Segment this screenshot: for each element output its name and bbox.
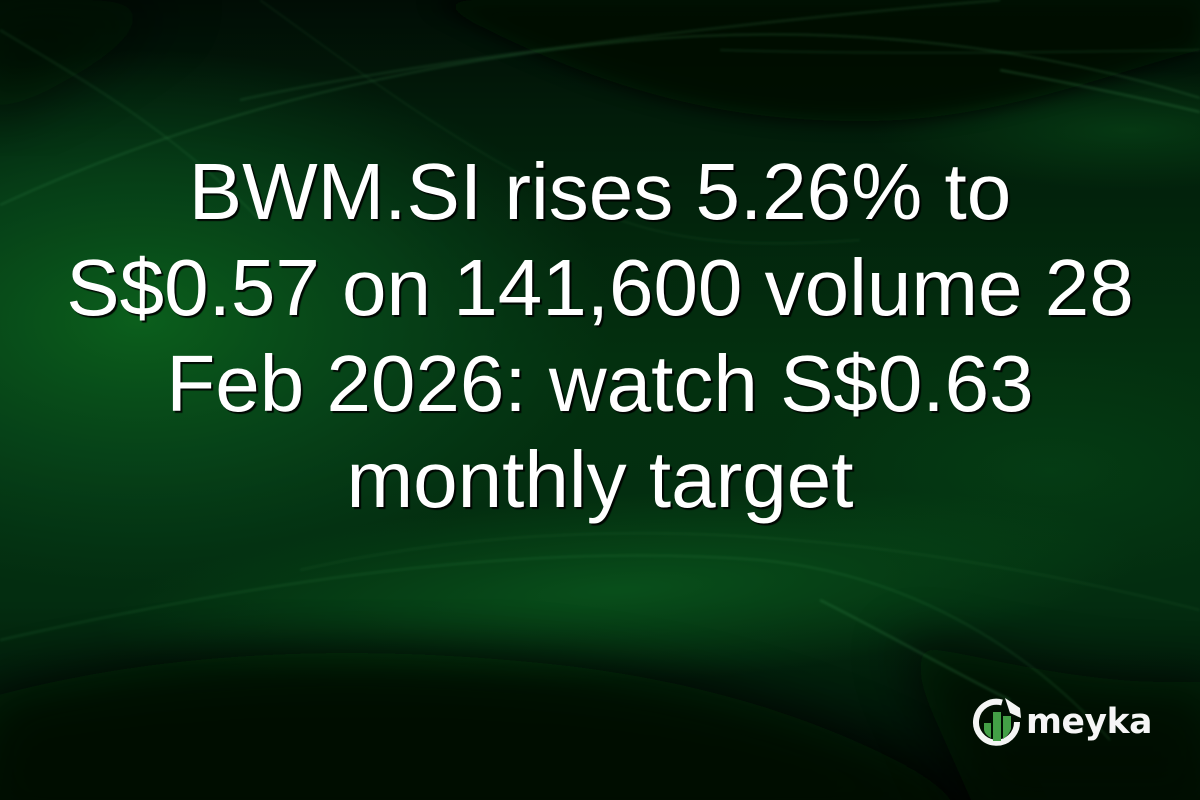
title: Feb 2026: watch S$0.63 — [166, 339, 1034, 428]
title: BWM.SI rises 5.26% to — [189, 147, 1011, 236]
icon: green bars — [984, 712, 1011, 741]
dark wave bands — [430, 0, 1200, 121]
title: S$0.57 on 141,600 volume 28 — [66, 243, 1134, 332]
icon: circular arrow ring — [976, 698, 1021, 743]
title — [66, 147, 1134, 526]
title: monthly target — [347, 435, 853, 524]
logo icon: circular arrow with green bars — [972, 698, 1021, 746]
logo wordmark: meyka — [1026, 702, 1152, 742]
